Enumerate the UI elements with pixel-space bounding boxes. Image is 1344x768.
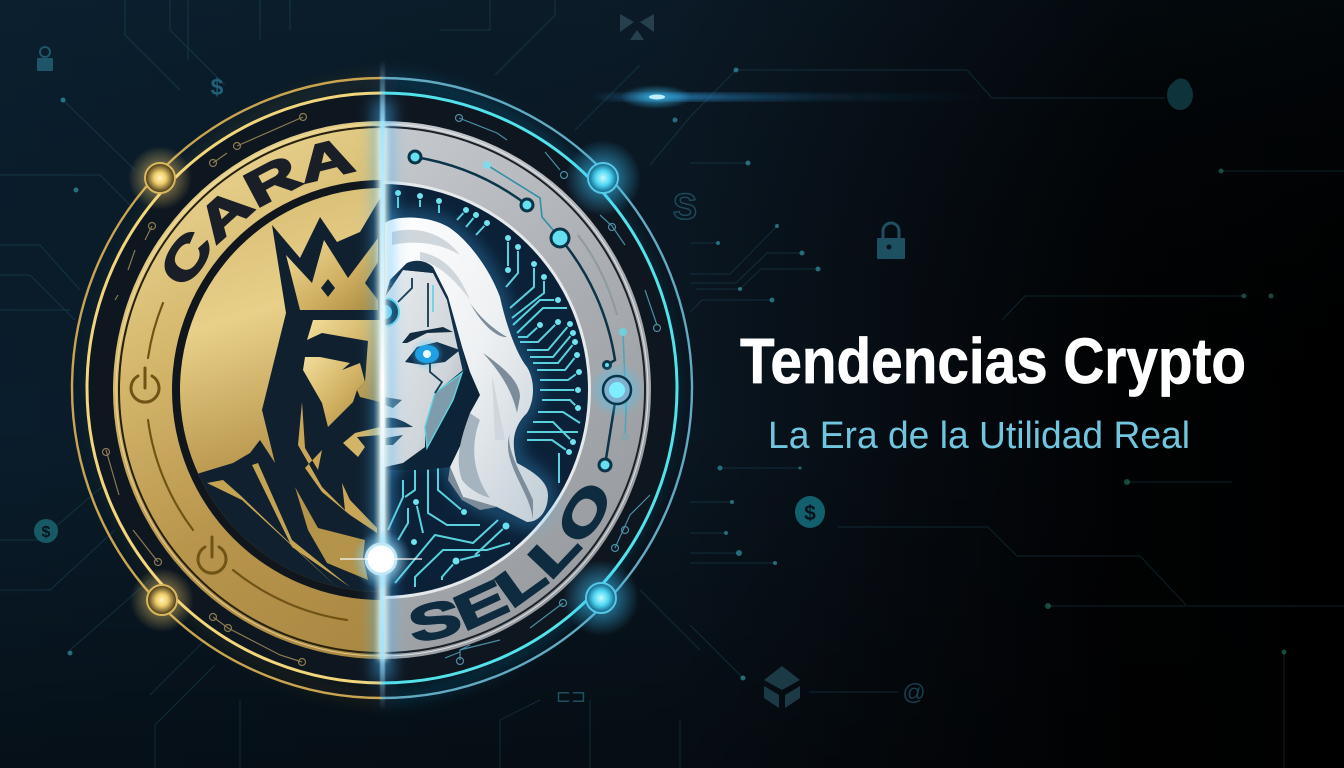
king silhouette	[198, 198, 380, 592]
hair outline near face	[390, 261, 467, 372]
node gold bottom	[130, 568, 194, 632]
forehead node	[371, 298, 399, 326]
ring micro circuits gold	[102, 114, 306, 666]
crown diamond	[321, 279, 335, 297]
nose	[385, 397, 402, 408]
icon: power bottom	[198, 537, 226, 573]
cape strand inner	[252, 463, 350, 587]
icon: dollar left: $	[42, 524, 51, 541]
icon: dollar coin: $	[804, 502, 816, 525]
ring micro circuits cyan	[445, 114, 660, 664]
background node dots	[60, 68, 820, 680]
outer rings: gold half	[70, 76, 382, 700]
band glow node right	[589, 362, 645, 418]
silver band circuit traces	[415, 157, 626, 465]
hair slate strands	[448, 303, 533, 520]
face	[385, 270, 463, 467]
icon: double S: S	[673, 186, 697, 227]
face seams	[398, 278, 442, 393]
crown	[286, 238, 378, 310]
icon: cube bottom	[764, 666, 800, 708]
silver band	[382, 121, 651, 659]
icon: dollar left	[34, 519, 58, 543]
disc surface	[180, 188, 380, 592]
icon: power left	[131, 368, 159, 402]
circuit traces lower left	[387, 468, 510, 587]
subtitle: La Era de la Utilidad Real	[768, 415, 1190, 457]
outer rings: cyan half	[382, 76, 694, 700]
woman cyborg	[371, 190, 582, 587]
coin ambient glow	[97, 80, 667, 698]
title: Tendencias Crypto	[740, 325, 1246, 397]
circuit pads	[394, 190, 582, 565]
eye	[405, 342, 460, 365]
node cyan bottom	[563, 560, 639, 636]
cheek circuit plate	[425, 373, 462, 448]
icon: chip marks bottom: ⊏⊐	[556, 686, 586, 706]
gold disc with king	[180, 188, 380, 592]
icon: hexagon blocks top	[620, 14, 654, 40]
node gold top	[128, 146, 192, 210]
dark area behind lower face	[386, 285, 456, 470]
gold band	[113, 121, 382, 659]
hair light grey streaks	[392, 230, 505, 440]
word: CARA: CARA	[164, 140, 357, 282]
hair glow	[385, 218, 548, 522]
hair main	[385, 218, 548, 522]
shoulder plate	[295, 487, 368, 580]
central light beam	[374, 60, 392, 710]
icon: lock top left	[37, 47, 53, 71]
circuit traces lower right	[527, 390, 580, 483]
faint far-right node dots	[1045, 168, 1286, 654]
upper lip	[385, 418, 413, 428]
coin dark base	[86, 93, 678, 685]
cape strand outer	[207, 480, 340, 590]
word: SELLO: SELLO	[410, 486, 607, 641]
iris	[411, 338, 443, 370]
coin	[70, 63, 694, 707]
pins	[388, 193, 580, 587]
lens flare top right	[590, 85, 990, 109]
node cyan top	[565, 140, 641, 216]
icon: dollar coin	[795, 496, 825, 528]
cheek	[303, 357, 365, 427]
cyan temple lead	[432, 285, 434, 312]
brow	[402, 327, 453, 343]
faint icons: dollars, locks, blocks	[34, 14, 1193, 708]
icon: dollar top: $	[211, 74, 224, 100]
forehead and nose column	[307, 320, 380, 402]
silver band circuit nodes	[409, 151, 629, 471]
gold band engraved lines and power icons	[131, 303, 347, 620]
beard strands	[298, 402, 377, 533]
king/cyborg seam node	[340, 530, 422, 590]
moustache	[343, 427, 380, 457]
icon: lock top right	[1167, 80, 1193, 110]
circuit traces upper right	[506, 238, 579, 380]
lower lip	[385, 435, 403, 445]
icon: lock center	[877, 223, 905, 259]
icon: at symbol: @	[902, 679, 926, 705]
